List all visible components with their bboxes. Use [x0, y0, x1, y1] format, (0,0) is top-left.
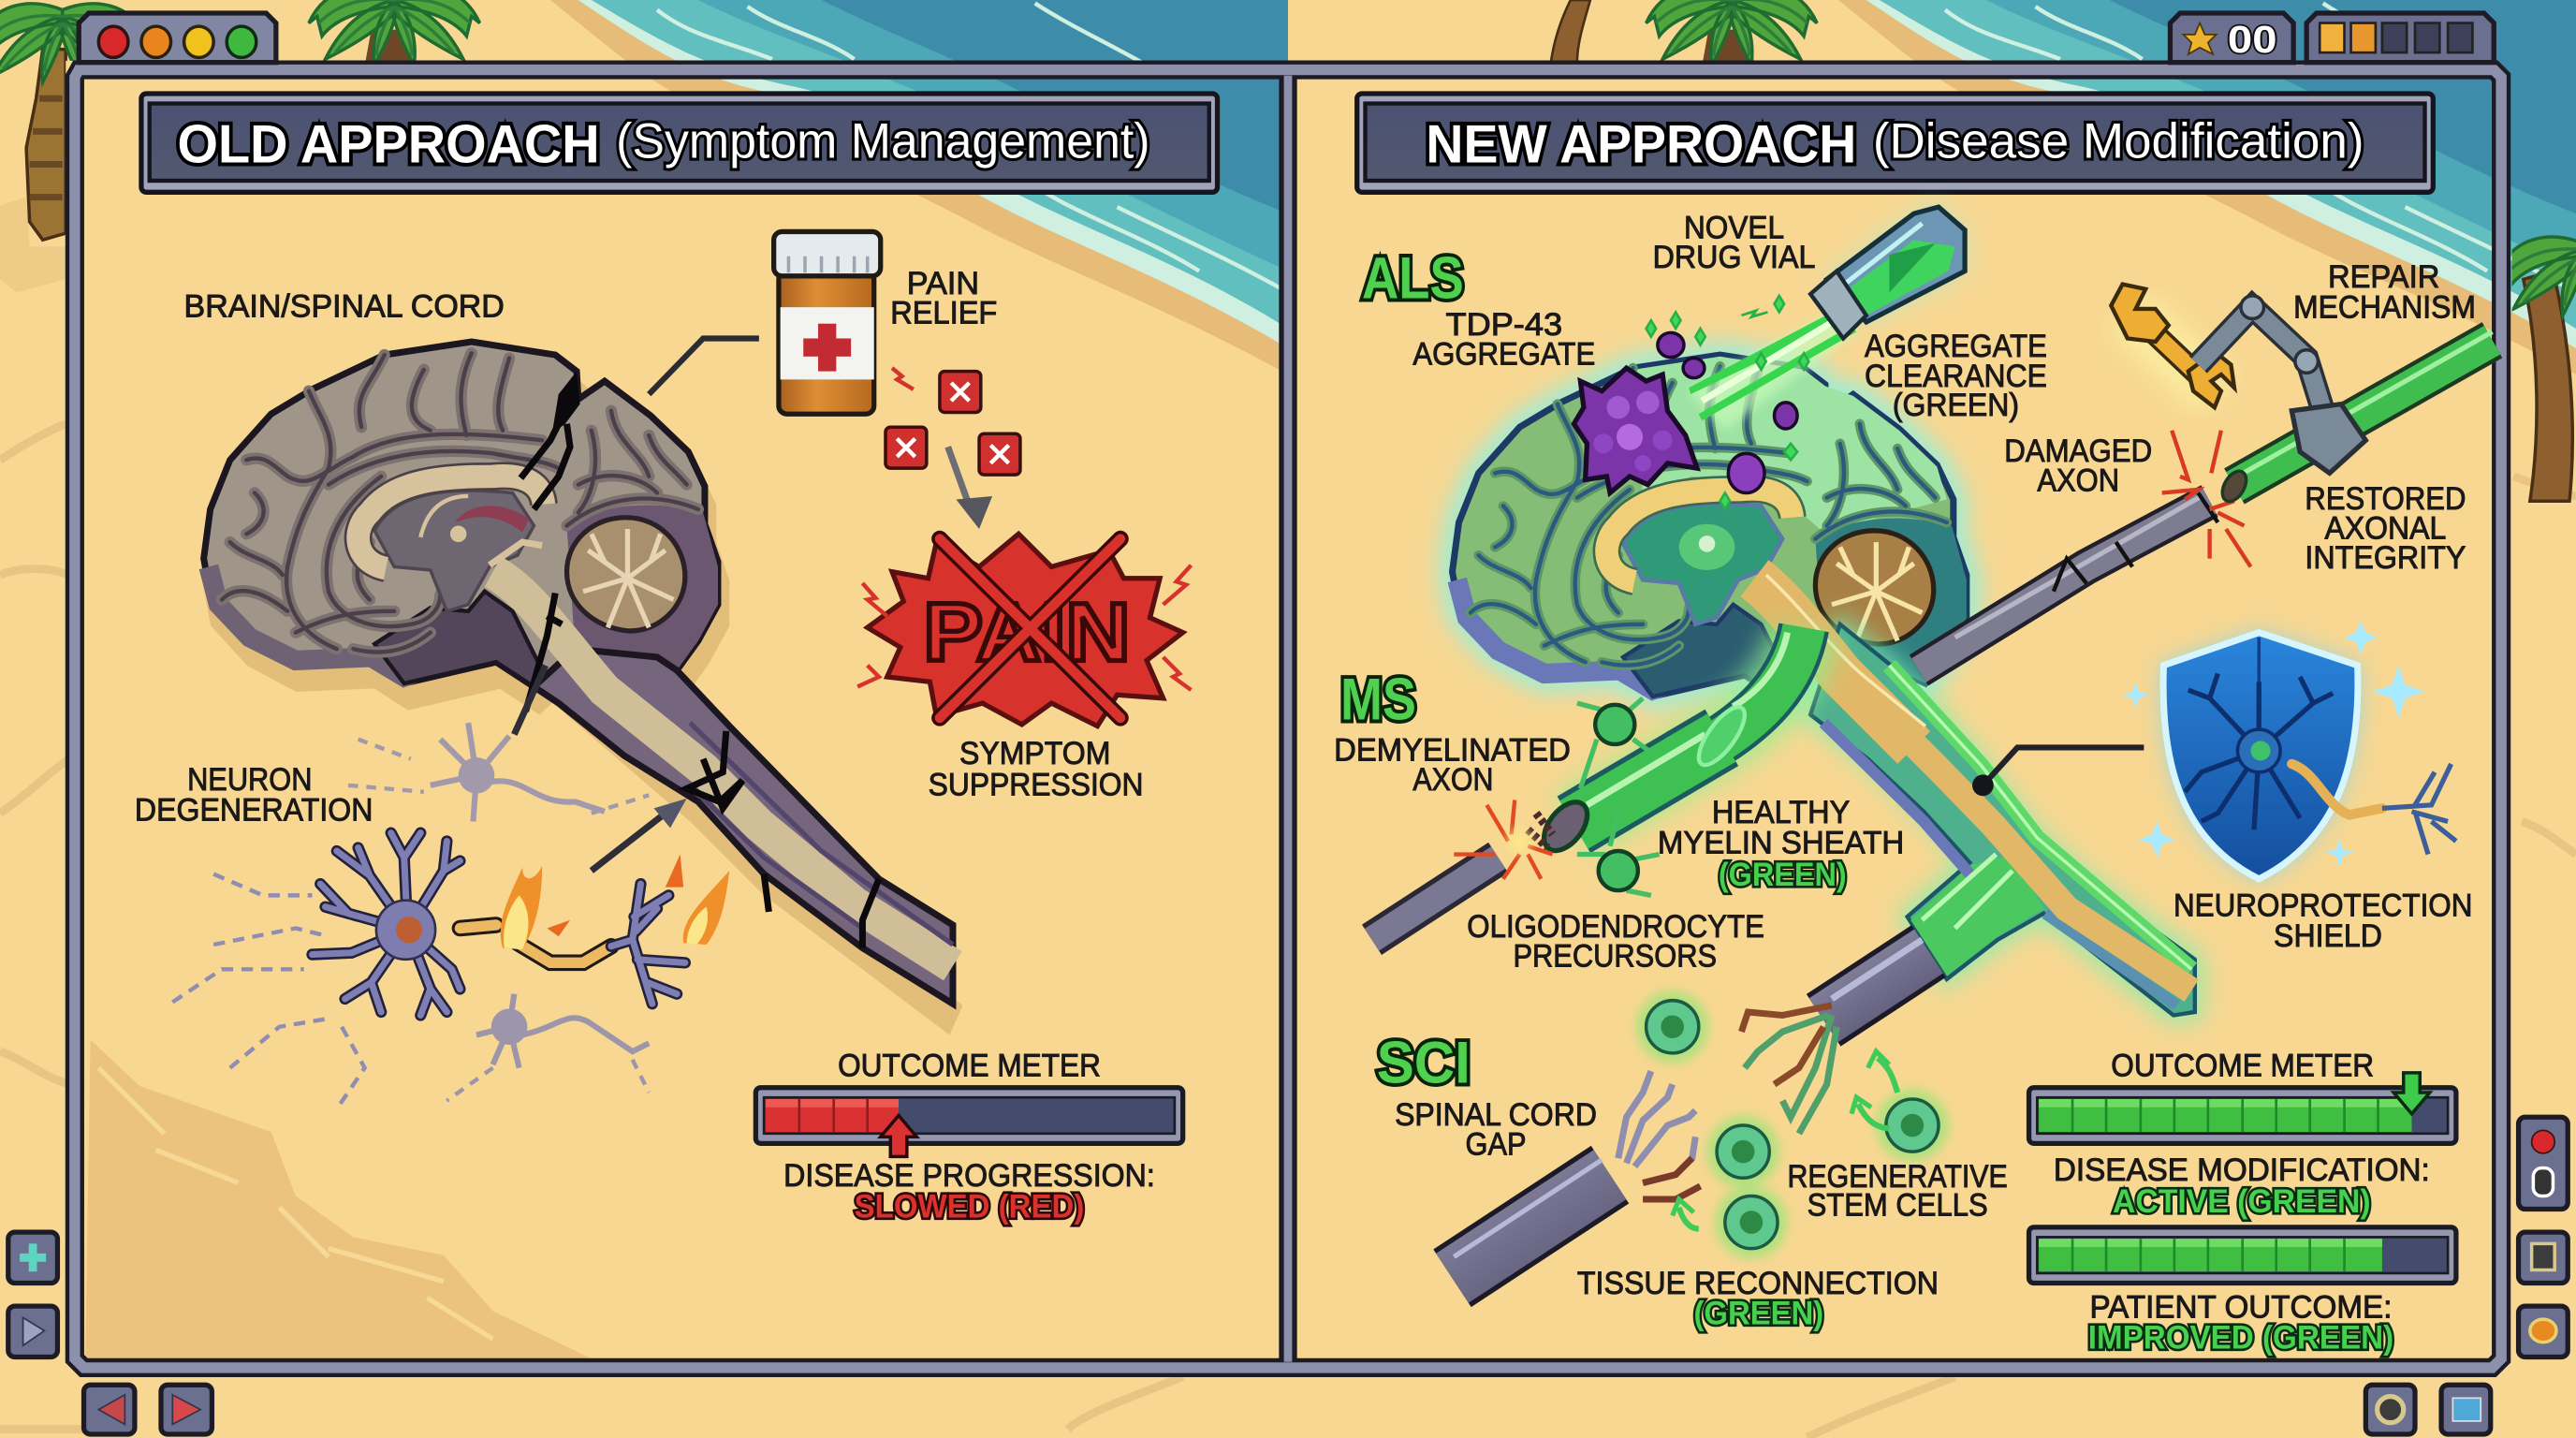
- label: spinal cord gap: [1395, 1097, 1597, 1163]
- arrow: signals to pain: [948, 447, 992, 529]
- label: symptom suppression: [929, 736, 1144, 802]
- label: spinal cord gap: GAP: [1466, 1127, 1526, 1163]
- label: MS: MS: [1340, 668, 1416, 733]
- label: TDP-43 aggregate: TDP-43: [1445, 307, 1562, 343]
- healing spinal cord: [1754, 575, 2195, 1015]
- label: regenerative stem cells: REGENERATIVE: [1788, 1159, 2008, 1195]
- meter bar: patient outcome: [2029, 1227, 2456, 1284]
- label: tissue reconnection: (GREEN): [1694, 1295, 1823, 1331]
- title bar: new approach: [1357, 94, 2433, 192]
- myelin sheath and demyelinated axon: [1372, 627, 1804, 940]
- label: neuroprotection shield: SHIELD: [2274, 918, 2382, 954]
- label: disease modification: ACTIVE (GREEN): [2113, 1183, 2371, 1220]
- label: TDP-43 aggregate: [1412, 307, 1595, 373]
- arrow: degeneration upward: [514, 666, 546, 734]
- label: regenerative stem cells: STEM CELLS: [1808, 1188, 1988, 1224]
- icon: crossed out pain burst: PAIN: [923, 586, 1131, 678]
- damaged axon: [1919, 431, 2250, 670]
- icon: green marker arrow: [2393, 1073, 2430, 1114]
- panel: new approach: [1334, 94, 2492, 1357]
- icon: regenerative stem cells: [1636, 990, 1949, 1258]
- healing brain: [1453, 355, 1967, 700]
- label: ALS: ALS: [1362, 246, 1464, 312]
- icon: repair wrench and arm: [2111, 285, 2323, 411]
- title bar: old approach: [141, 94, 1218, 192]
- label: healthy myelin sheath: MYELIN SHEATH: [1658, 826, 1904, 861]
- label: aggregate clearance: CLEARANCE: [1865, 359, 2047, 394]
- label: regenerative stem cells: [1788, 1159, 2008, 1224]
- label: neuron degeneration: NEURON: [187, 762, 312, 798]
- outcome meter: old: [755, 1048, 1183, 1225]
- icon: flames on axon: [501, 855, 729, 949]
- label: demyelinated axon: [1334, 732, 1571, 798]
- label: oligodendrocyte precursors: PRECURSORS: [1513, 939, 1717, 975]
- icon: fading neuron upper: [348, 723, 649, 821]
- label: patient outcome: PATIENT OUTCOME:: [2089, 1289, 2392, 1325]
- label: aggregate clearance: (GREEN): [1893, 388, 2019, 423]
- title bar: old approach: (Symptom Management): [616, 113, 1150, 169]
- label: outcome meter: OUTCOME METER: [2111, 1048, 2374, 1083]
- label: healthy myelin sheath: HEALTHY: [1712, 795, 1850, 830]
- label: oligodendrocyte precursors: OLIGODENDROCYTE: [1467, 909, 1764, 945]
- icon: fading neuron lower: [446, 994, 649, 1101]
- label: damaged axon: [2004, 433, 2152, 499]
- icon: purple aggregate: [1573, 332, 1797, 492]
- meter bar: disease modification: [2029, 1088, 2456, 1143]
- label: symptom suppression: SUPPRESSION: [929, 767, 1144, 802]
- arrows: stem cell migration: [1673, 1051, 1897, 1229]
- label: damaged axon: DAMAGED: [2004, 433, 2152, 469]
- label: patient outcome: [2088, 1289, 2393, 1357]
- score display: [2170, 13, 2293, 63]
- label: aggregate clearance: [1865, 329, 2047, 423]
- label: demyelinated axon: DEMYELINATED: [1334, 732, 1571, 768]
- label: restored axonal integrity: [2305, 481, 2466, 576]
- label: healthy myelin sheath: (GREEN): [1719, 857, 1847, 893]
- severed cord upper stump with wires: [1741, 940, 1928, 1134]
- callout line to shield: [1972, 747, 2144, 796]
- title bar: new approach: (Disease Modification): [1873, 113, 2364, 169]
- icon: neuroprotection shield: [2123, 621, 2456, 879]
- label: neuron degeneration: [135, 762, 373, 829]
- icon: red marker arrow: [881, 1116, 916, 1156]
- title bar: old approach: OLD APPROACH: [178, 115, 600, 175]
- label: repair mechanism: [2293, 259, 2476, 326]
- label: novel drug vial: NOVEL: [1684, 210, 1784, 245]
- label: outcome meter: OUTCOME METER: [838, 1048, 1101, 1083]
- green beam: [1647, 296, 1856, 509]
- title bar: new approach: NEW APPROACH: [1426, 115, 1856, 175]
- icon: crossed out pain burst: [857, 534, 1191, 726]
- label: oligodendrocyte precursors: [1467, 909, 1764, 975]
- label: neuroprotection shield: [2174, 888, 2472, 954]
- label: restored axonal integrity: RESTORED: [2305, 481, 2466, 517]
- label: pain relief: PAIN: [907, 266, 979, 301]
- label: neuron degeneration: DEGENERATION: [135, 793, 373, 829]
- label: repair mechanism: REPAIR: [2328, 259, 2439, 295]
- label: neuroprotection shield: NEUROPROTECTION: [2174, 888, 2472, 923]
- label: disease progression: SLOWED (RED): [855, 1188, 1084, 1225]
- label: patient outcome: IMPROVED (GREEN): [2088, 1320, 2393, 1357]
- damaged brain and spinal cord: [204, 342, 962, 1035]
- side and bottom buttons: [8, 1117, 2568, 1434]
- palm trees: [0, 0, 2576, 501]
- restored green axon: [2217, 331, 2492, 506]
- score display: 00: [2228, 18, 2277, 61]
- label: tissue reconnection: TISSUE RECONNECTION: [1577, 1266, 1939, 1301]
- icon: blocked pain signals: [886, 368, 1020, 475]
- label: disease modification: DISEASE MODIFICATION:: [2054, 1152, 2430, 1188]
- severed cord lower stump with wires: [1453, 1071, 1701, 1278]
- label: novel drug vial: DRUG VIAL: [1653, 240, 1815, 275]
- label: repair mechanism: MECHANISM: [2293, 290, 2476, 326]
- label: damaged axon: AXON: [2037, 463, 2119, 499]
- label: restored axonal integrity: INTEGRITY: [2305, 540, 2466, 576]
- arrow: neuron to cord: [592, 799, 687, 871]
- icon: degenerating main neuron: [172, 833, 685, 1109]
- label: demyelinated axon: AXON: [1412, 762, 1493, 798]
- label: pain relief: RELIEF: [890, 296, 997, 331]
- energy squares display: [2306, 13, 2494, 63]
- label: pain relief: [890, 266, 997, 331]
- label: disease progression: DISEASE PROGRESSION:: [783, 1158, 1155, 1194]
- panel: old approach: [135, 94, 1218, 1225]
- label: aggregate clearance: AGGREGATE: [1865, 329, 2047, 364]
- label: spinal cord gap: SPINAL CORD: [1395, 1097, 1597, 1133]
- label: disease modification: [2054, 1152, 2430, 1220]
- label: novel drug vial: [1653, 210, 1815, 275]
- icon: drug vial: [1810, 205, 1965, 338]
- label: SCI: SCI: [1377, 1030, 1471, 1095]
- label: brain/spinal cord: BRAIN/SPINAL CORD: [184, 289, 505, 325]
- outcome meters: new: [2029, 1048, 2456, 1357]
- callout line to pill bottle: [649, 338, 759, 394]
- label: symptom suppression: SYMPTOM: [959, 736, 1110, 771]
- label: TDP-43 aggregate: AGGREGATE: [1412, 337, 1595, 373]
- label: healthy myelin sheath: [1658, 795, 1904, 893]
- label: disease progression: [783, 1158, 1155, 1225]
- meter bar: [755, 1088, 1183, 1143]
- icon: pill bottle: [774, 231, 881, 414]
- window control tab: [79, 13, 276, 63]
- label: tissue reconnection: [1577, 1266, 1939, 1331]
- label: restored axonal integrity: AXONAL: [2324, 511, 2446, 547]
